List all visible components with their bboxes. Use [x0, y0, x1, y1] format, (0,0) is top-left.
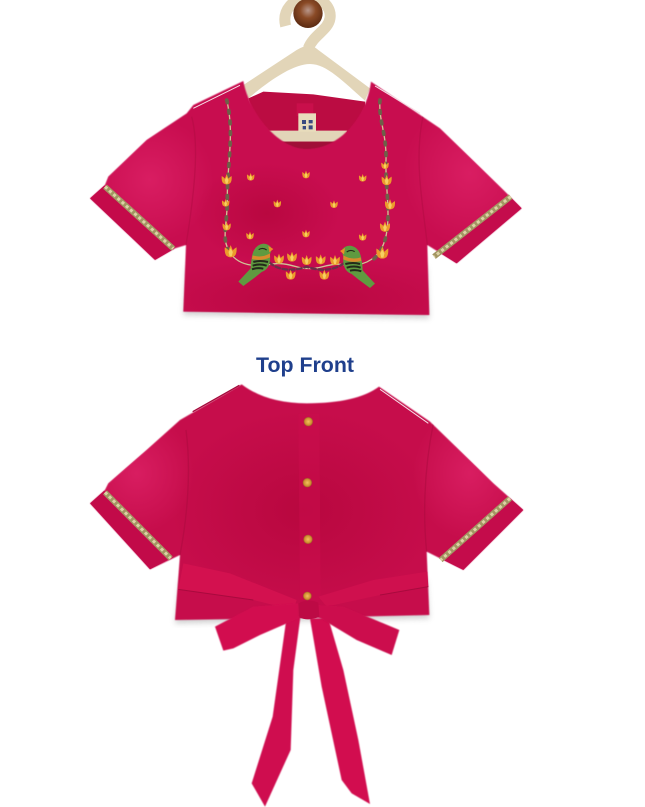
garment shadow [183, 267, 429, 318]
left sleeve trim [105, 187, 173, 249]
vine tulips [222, 161, 395, 280]
back body and sleeves [90, 384, 523, 620]
armhole seams [180, 423, 433, 555]
back left sleeve trim [105, 492, 171, 558]
vines [225, 100, 388, 269]
shoulder seams [186, 115, 427, 245]
left shoulder strap [193, 85, 240, 108]
infographic canvas [90, 0, 524, 807]
embroidery garland [225, 100, 388, 270]
top garment body and sleeves [90, 81, 522, 315]
inner neck shadow [277, 142, 342, 150]
inside back neck [248, 92, 367, 150]
fabric shading [90, 116, 522, 315]
back right sleeve trim [441, 498, 510, 560]
hanger lower bar [266, 131, 347, 142]
top garment back view with bow [80, 384, 527, 807]
hanger knob [293, 0, 323, 28]
back garment shadow [175, 580, 429, 623]
belt bands [178, 563, 428, 610]
left back cuff [90, 491, 171, 569]
hanger [243, 0, 370, 101]
buttons [303, 417, 313, 600]
right shoulder strap [375, 86, 420, 113]
caption: Top Front: Top Front [256, 354, 354, 377]
bow knot [298, 601, 319, 619]
placket [300, 506, 308, 514]
left cuff [90, 185, 175, 260]
right bird [340, 246, 375, 288]
top garment front view on hanger [90, 0, 522, 321]
left bird [238, 244, 273, 286]
scattered tulips [246, 171, 366, 241]
ribbon tails [252, 615, 370, 807]
back right strap [380, 389, 428, 423]
back fabric shading [90, 424, 523, 570]
right back cuff [440, 497, 523, 570]
back left strap [193, 385, 239, 412]
right cuff [442, 198, 522, 264]
bow loops [215, 603, 399, 655]
neck label [297, 103, 316, 132]
right sleeve trim [434, 197, 511, 257]
